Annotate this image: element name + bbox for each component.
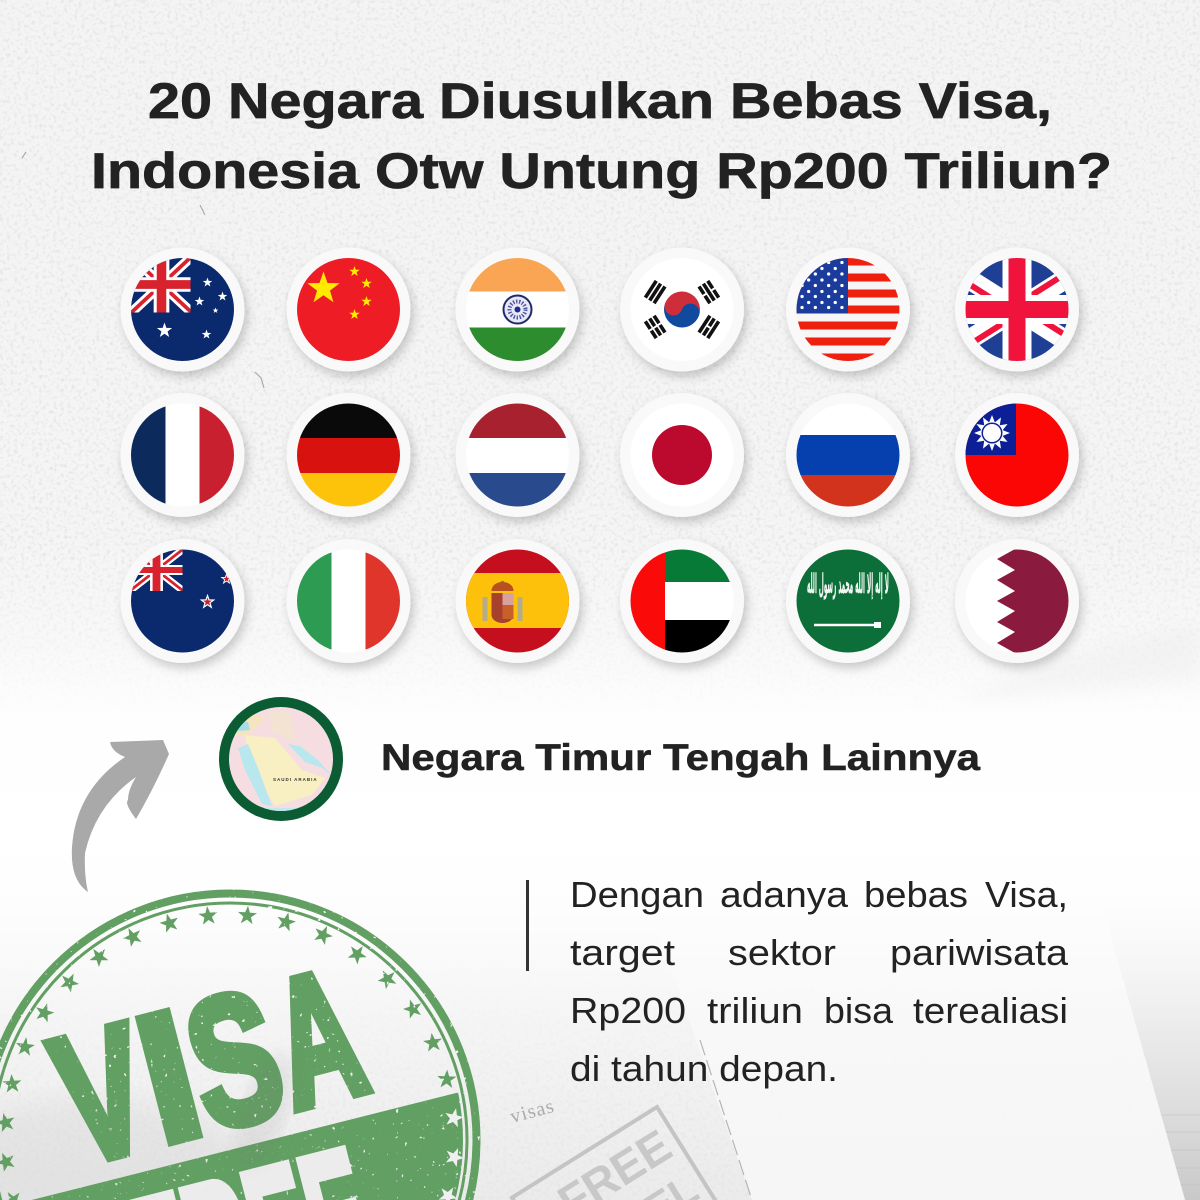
flag: Taiwan: [955, 393, 1079, 517]
flag: United States: [786, 248, 910, 372]
visa free rubber stamp: [0, 894, 520, 1200]
flag: Netherlands: [456, 393, 580, 517]
body text: tourism target: Rp200: [570, 990, 686, 1031]
flag: Spain: [456, 539, 580, 663]
flag: Saudi Arabia: [786, 539, 910, 663]
body text: tourism target: target: [570, 932, 675, 973]
flag grid: [120, 248, 1107, 663]
flag: China: [286, 248, 410, 372]
stamp stars: [0, 905, 459, 1200]
body text: tourism target: di tahun depan.: [570, 1048, 838, 1089]
stamp word VISA: I: [119, 972, 219, 1182]
body text: tourism target: [570, 874, 1069, 1089]
flag: United Kingdom: [954, 248, 1086, 381]
flag: Russia: [786, 393, 910, 517]
icon: Middle East map: [219, 697, 343, 821]
title: Indonesia Otw Untung Rp200 Triliun?: [91, 143, 1112, 199]
flag: Italy: [286, 539, 410, 663]
body text: tourism target: bisa: [824, 990, 894, 1031]
free travel stamp: [509, 1107, 721, 1200]
flag: United Arab Emirates: [620, 539, 744, 663]
stamp word VISA: [40, 970, 376, 1163]
stamp shading smudge: [224, 1046, 306, 1174]
stamp rings: [0, 894, 476, 1200]
body text: tourism target: sektor: [728, 932, 836, 973]
flag: Australia: [120, 248, 244, 372]
icon: Middle East map: SAUDI ARABIA: [273, 777, 318, 782]
stamp word VISA: S: [168, 952, 301, 1169]
flag: France: [120, 393, 244, 517]
flag: India: [456, 248, 580, 372]
subheading: other Middle East countries: Negara Timur Tengah Lainnya: [381, 737, 980, 778]
flag: Germany: [286, 393, 410, 517]
body text: tourism target: pariwisata: [890, 932, 1069, 973]
flag: South Korea: [620, 248, 744, 372]
body text: tourism target: terealiasi: [913, 990, 1068, 1031]
stamp banner with FREE: [32, 1092, 463, 1200]
body text: tourism target: bebas: [864, 874, 968, 915]
title: [91, 73, 1112, 199]
divider line beside body text: [526, 880, 529, 971]
arrow pointing to Middle East map: [72, 740, 169, 892]
body text: tourism target: triliun: [707, 990, 803, 1031]
title: 20 Negara Diusulkan Bebas Visa,: [148, 73, 1052, 129]
flag grid: لا إله إلا الله محمد رسول الله: [807, 569, 889, 600]
flag: New Zealand: [120, 539, 244, 663]
stamp word VISA: V: [36, 986, 168, 1200]
visas label: visas: [508, 1095, 557, 1128]
body text: tourism target: Visa,: [985, 874, 1068, 915]
body text: tourism target: Dengan: [570, 874, 704, 915]
body text: tourism target: adanya: [720, 874, 849, 915]
flag: Qatar: [955, 539, 1079, 663]
flag: Japan: [620, 393, 744, 517]
stamp word VISA: A: [253, 931, 383, 1148]
passport page background: [509, 1019, 1200, 1200]
